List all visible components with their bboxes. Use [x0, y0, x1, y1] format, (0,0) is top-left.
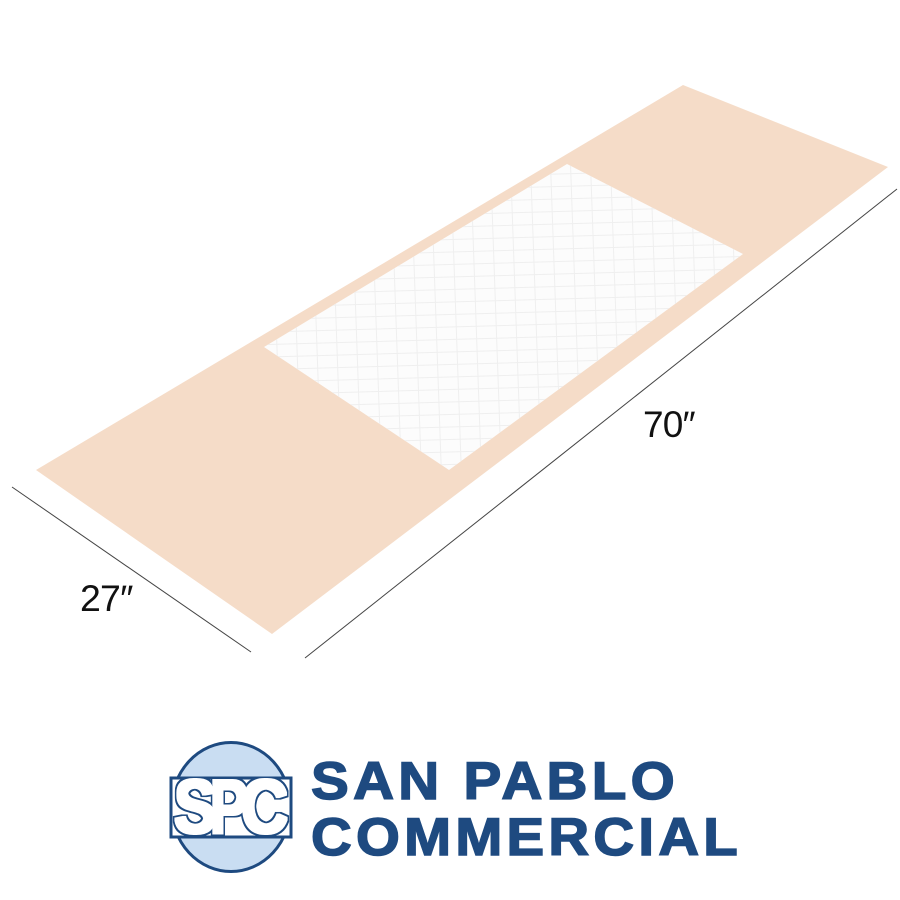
- logo wordmark: [311, 752, 742, 867]
- logo wordmark: SAN PABLO: [311, 752, 679, 811]
- dimension line: length: [305, 189, 897, 658]
- dimension line: width: [12, 487, 251, 652]
- icon: SPC logo: [171, 742, 291, 872]
- icon: SPC logo: S: [174, 765, 216, 850]
- panel: white quilted pad: [264, 164, 743, 470]
- dimension label: 70 inches: 70″: [643, 404, 696, 445]
- icon: SPC logo: C: [241, 765, 288, 850]
- logo wordmark: COMMERCIAL: [311, 808, 742, 867]
- dimension label: 27 inches: 27″: [80, 577, 133, 619]
- panel: peach underpad sheet: [36, 85, 888, 634]
- icon: SPC logo: P: [210, 765, 248, 850]
